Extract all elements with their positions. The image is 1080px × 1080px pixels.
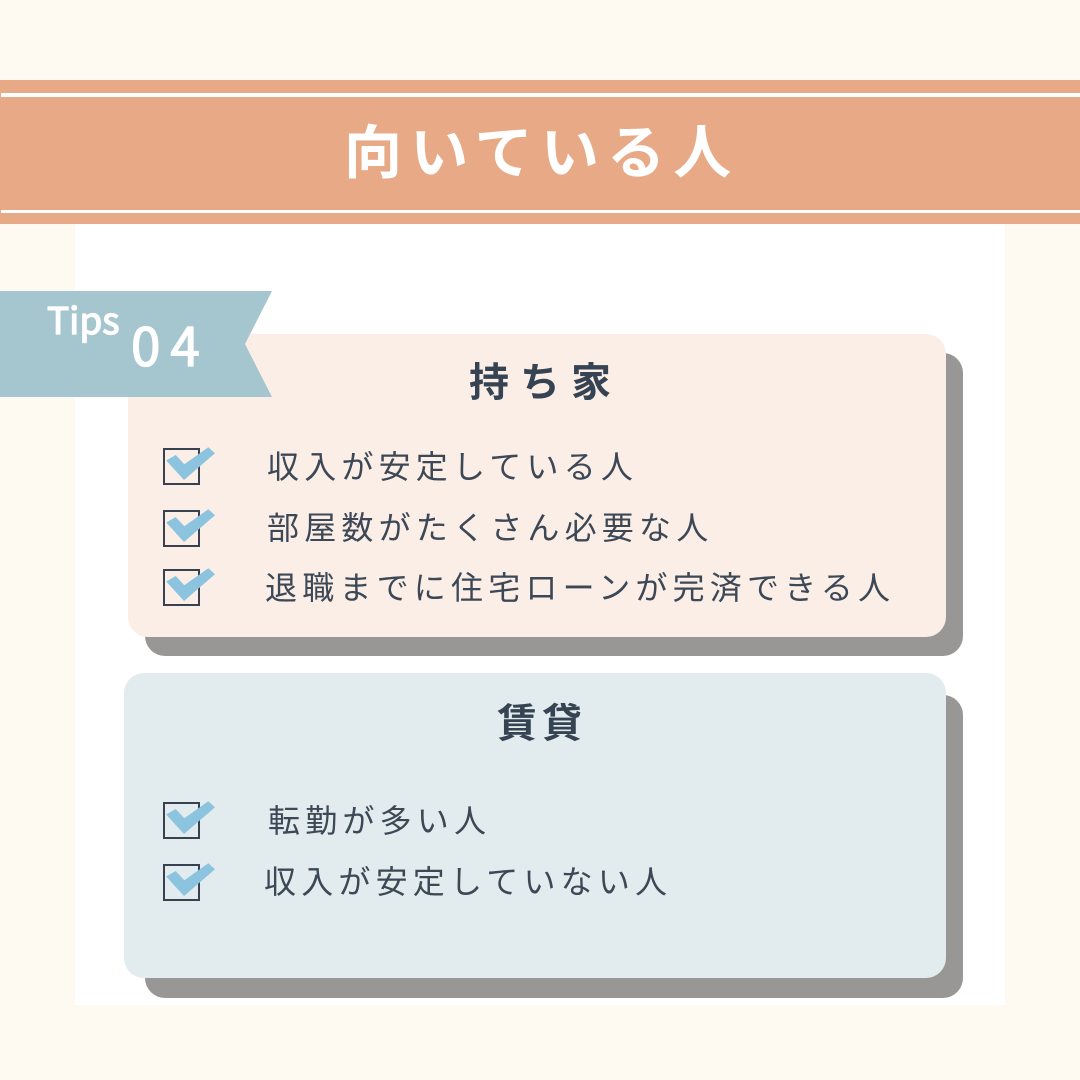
list text 3: 退職までに住宅ローンが完済できる人 [265,570,895,606]
list text 5: 収入が安定していない人 [264,864,672,900]
panel: rental [124,673,946,978]
check icon 3 [163,568,215,606]
heading: owned home: 持ち家 [469,361,622,405]
list text 4: 転勤が多い人 [268,803,491,839]
panel shadow: owned home [145,353,963,656]
white content panel [75,80,1005,1005]
tips number: 04 [131,306,210,382]
tips label: Tips [47,291,120,345]
tips ribbon [0,291,272,397]
list text 1: 収入が安定している人 [267,449,638,485]
check icon 1 [163,447,215,485]
panel shadow: rental [145,695,963,998]
heading: rental: 賃貸 [497,702,587,746]
list text 2: 部屋数がたくさん必要な人 [267,510,713,546]
title: 向いている人 [344,121,739,186]
check icon 5 [163,863,215,901]
check icon 4 [163,801,215,839]
title banner [0,80,1080,224]
panel: owned home [128,334,946,637]
check icon 2 [163,509,215,547]
